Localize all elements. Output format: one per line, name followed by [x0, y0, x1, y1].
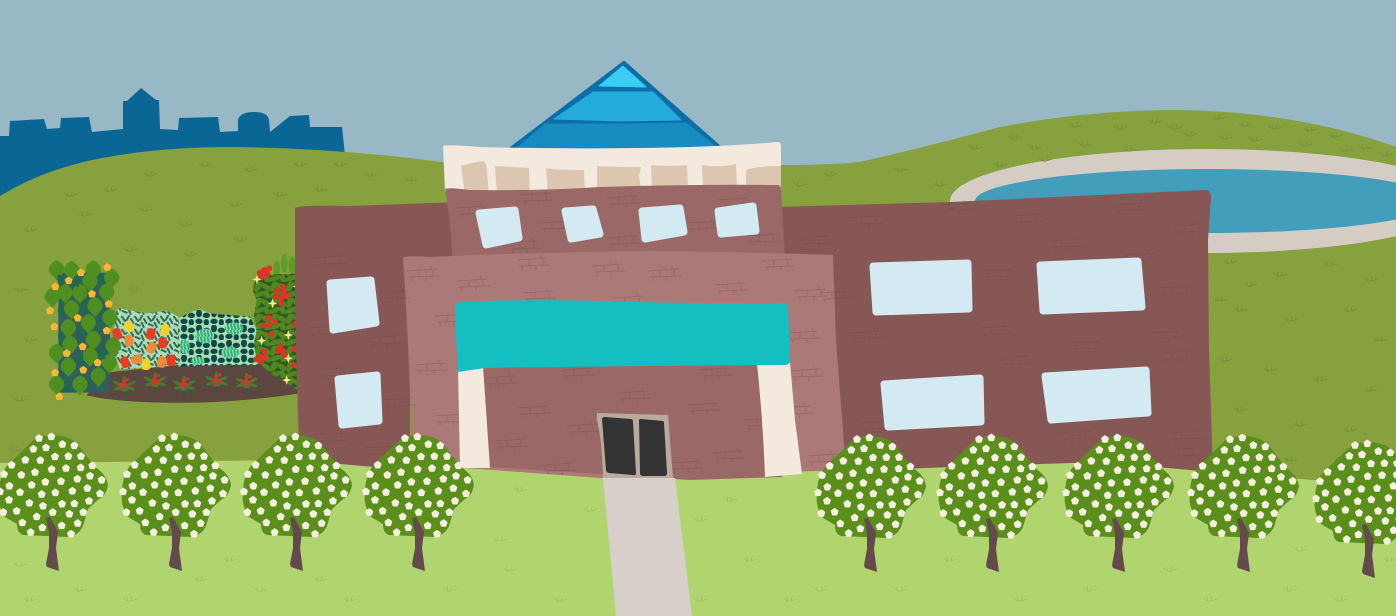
grass tufts on hills: [9, 115, 1392, 461]
blossoming tree 3: [241, 434, 352, 571]
lawn: [0, 460, 1396, 616]
leafy greens patch: [178, 309, 260, 367]
front block: [403, 251, 846, 478]
right wing: [775, 190, 1213, 472]
blossoming tree 2: [120, 434, 231, 571]
pepper patch: [111, 308, 180, 370]
pond: [950, 149, 1396, 253]
grass tufts on lawn: [14, 487, 1396, 601]
rolling green hills: [0, 110, 1396, 500]
blossoming tree 5: [815, 435, 926, 572]
upper central block: [445, 185, 785, 260]
cornice: [443, 142, 781, 192]
blossoming tree 4: [363, 434, 474, 571]
vegetable garden: [45, 254, 302, 403]
windows: [330, 206, 1148, 427]
cornice panels: [461, 161, 781, 195]
entrance recess: [480, 350, 782, 480]
right column: [757, 362, 802, 477]
blossoming tree 7: [1063, 435, 1174, 572]
cucumber vine trellis: [45, 260, 121, 399]
blossoming tree 9: [1313, 441, 1396, 578]
blossoming tree 8: [1188, 435, 1299, 572]
tomato vine trellis: [252, 254, 302, 392]
brick texture: [308, 190, 1206, 475]
left column: [458, 366, 490, 468]
blossoming tree 1: [0, 434, 108, 571]
blossoming tree 6: [937, 435, 1048, 572]
glass pyramid roof: [512, 63, 720, 149]
soil bed: [87, 363, 300, 403]
city skyline silhouette: [0, 88, 345, 205]
door: [597, 413, 673, 478]
front walkway: [603, 478, 692, 616]
left wing: [295, 202, 460, 470]
teal sign band: [455, 300, 790, 372]
tomato seedlings: [112, 371, 259, 397]
building: [295, 63, 1213, 616]
